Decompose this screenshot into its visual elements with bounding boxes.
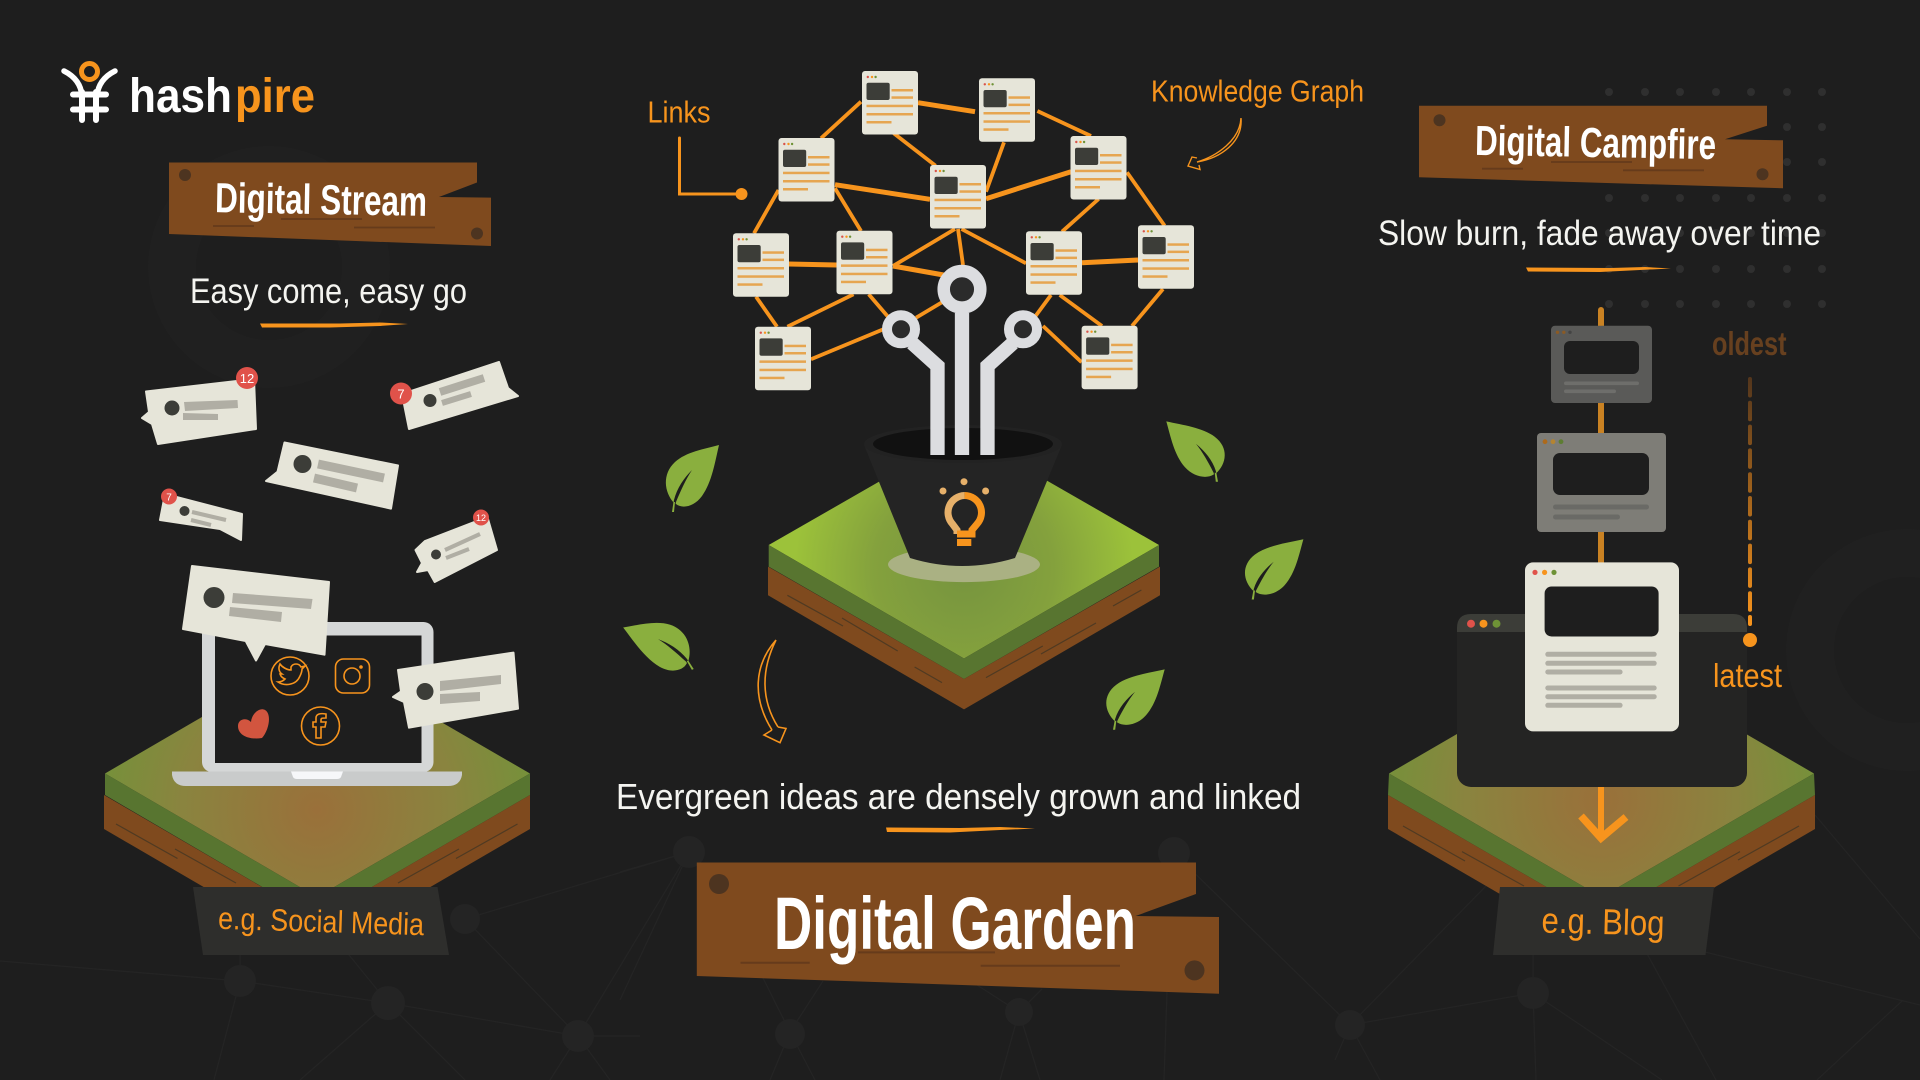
tagline: easy come, easy go: Easy come, easy go [190, 272, 467, 311]
brush underline [886, 827, 1035, 832]
logo: hashpire [64, 64, 315, 123]
logo wordmark: hash [129, 70, 232, 123]
card 11 [1082, 326, 1138, 389]
label: knowledge graph [1151, 74, 1364, 170]
logo wordmark [129, 70, 315, 123]
banner: Digital Stream [169, 162, 491, 246]
brush underline [1526, 267, 1671, 272]
plant pot [864, 425, 1062, 566]
logo icon [64, 64, 115, 120]
banner: Digital Campfire: Digital Campfire [1475, 117, 1716, 168]
chat bubble 2: 7 [397, 386, 405, 402]
panel: digital garden [616, 71, 1364, 994]
label: social media: e.g. Social Media [218, 901, 425, 942]
chat bubble 4: 7 [166, 492, 172, 504]
card 1 [862, 71, 918, 134]
panel: digital stream [104, 162, 530, 955]
banner: Digital Garden: Digital Garden [774, 882, 1136, 965]
chat bubble 3 [266, 442, 398, 509]
icon: heart [238, 709, 269, 738]
island: garden [768, 433, 1160, 709]
leaf 5 [1106, 669, 1165, 730]
chat bubble 4 [160, 488, 242, 540]
timeline end dot [1743, 633, 1757, 647]
banner: Digital Stream: Digital Stream [215, 174, 427, 225]
card 4 [1070, 136, 1126, 200]
links network [754, 102, 1165, 362]
chat bubble 7 [393, 653, 518, 728]
leaf 1 [666, 445, 719, 512]
leaf 4 [1245, 539, 1303, 600]
brush underline [260, 322, 408, 328]
chat bubble 6 [183, 566, 329, 660]
label: links: Links [648, 94, 710, 130]
label: blog [1493, 887, 1714, 955]
banner: Digital Campfire [1419, 106, 1783, 188]
label: knowledge graph: Knowledge Graph [1151, 74, 1364, 108]
icon: light bulb [940, 478, 989, 546]
icon: instagram [336, 659, 370, 693]
tagline: slow burn: Slow burn, fade away over time [1378, 214, 1821, 253]
card 9 [1138, 225, 1194, 289]
icon: twitter [271, 657, 309, 695]
leaf 2 [1166, 421, 1225, 482]
card 2 [979, 78, 1035, 142]
island: social media [104, 650, 530, 953]
label: blog: e.g. Blog [1541, 899, 1665, 944]
older post [1537, 433, 1666, 532]
oldest post [1551, 326, 1652, 403]
chat bubble 1: 12 [240, 371, 254, 386]
curved arrow [758, 640, 786, 743]
card 3 [778, 138, 834, 202]
browser window [1457, 614, 1747, 787]
label: social media [193, 887, 449, 955]
label: oldest: oldest [1712, 325, 1787, 362]
timeline dashed line [1748, 379, 1752, 624]
background dot grid [1605, 88, 1826, 308]
chat bubble 2 [390, 362, 518, 429]
card 7 [836, 231, 892, 294]
latest post [1525, 562, 1679, 731]
card 6 [733, 233, 789, 297]
chat bubble 5 [416, 510, 497, 582]
laptop [172, 622, 462, 786]
down arrow [1581, 787, 1626, 838]
tagline: evergreen ideas: Evergreen ideas are densely grown and linked [616, 776, 1301, 817]
banner: Digital Garden [697, 862, 1219, 994]
label: latest: latest [1713, 657, 1782, 694]
icon: facebook [302, 707, 340, 745]
label: links [648, 94, 748, 200]
circuit tree [887, 271, 1037, 455]
chat bubble 5: 12 [476, 513, 486, 523]
card 10 [755, 327, 811, 390]
logo wordmark: pire [235, 70, 315, 123]
timeline connector [1598, 310, 1604, 565]
background network [0, 815, 1920, 1080]
leaf 3 [623, 605, 699, 688]
chat bubble 1 [142, 367, 258, 444]
background rings [172, 170, 1920, 747]
card 5 [930, 165, 986, 228]
panel: digital campfire [1378, 106, 1821, 955]
card 8 [1026, 231, 1082, 295]
island: blog [1388, 650, 1815, 953]
